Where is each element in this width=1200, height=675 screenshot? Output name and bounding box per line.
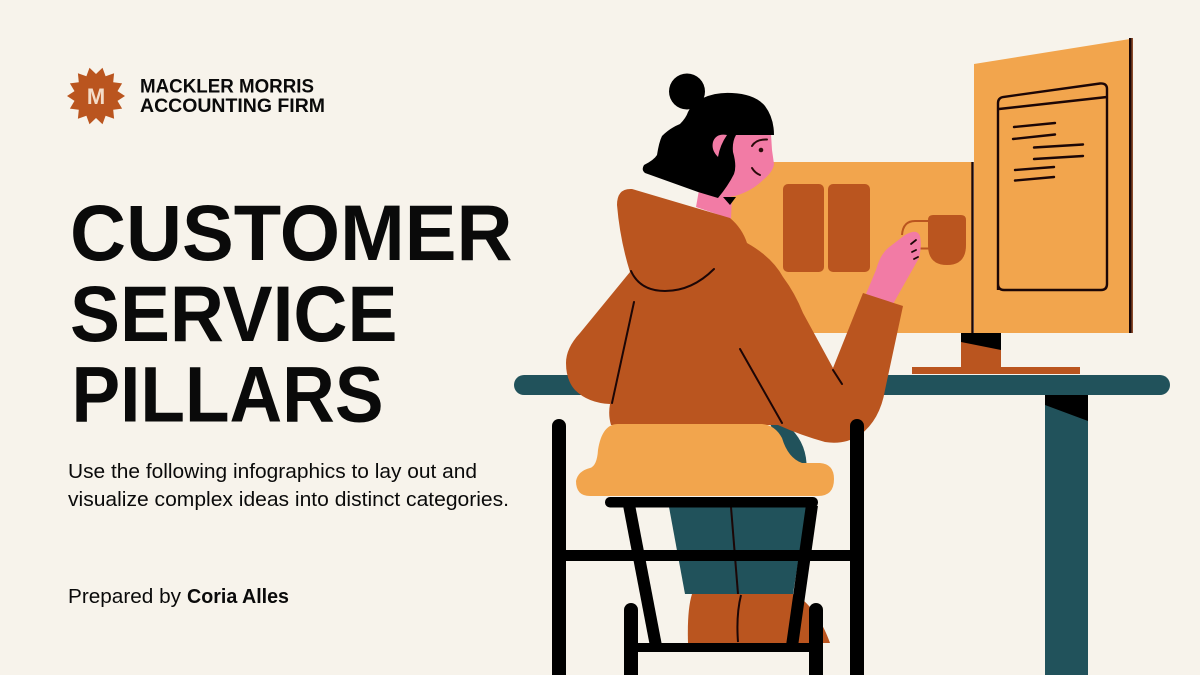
left monitor bbox=[720, 162, 973, 333]
description text: visualize complex ideas into distinct categories. bbox=[68, 489, 509, 511]
chin shadow bbox=[723, 197, 736, 205]
title bbox=[70, 188, 512, 438]
title: SERVICE bbox=[70, 269, 398, 358]
desk bbox=[514, 375, 1170, 675]
icon: starburst badge: M bbox=[87, 84, 105, 109]
hoodie bbox=[566, 189, 903, 443]
logo bbox=[67, 68, 325, 124]
illustration: person at desk bbox=[514, 38, 1170, 675]
presenter credit bbox=[68, 586, 289, 608]
hair bbox=[643, 93, 774, 198]
hand bbox=[866, 232, 921, 304]
right monitor bbox=[974, 38, 1133, 333]
hair bun bbox=[669, 74, 705, 110]
description text: Use the following infographics to lay out and bbox=[68, 461, 477, 483]
facial features bbox=[752, 139, 767, 175]
teal trousers bbox=[669, 424, 807, 594]
presenter credit: Coria Alles bbox=[187, 586, 289, 608]
coffee mug bbox=[902, 215, 966, 265]
chair frame bbox=[559, 426, 857, 675]
title: CUSTOMER bbox=[70, 188, 512, 277]
icon: starburst badge bbox=[67, 68, 125, 124]
monitor stand bbox=[912, 333, 1080, 374]
shoes bbox=[688, 594, 830, 643]
company name bbox=[140, 76, 325, 117]
title: PILLARS bbox=[72, 350, 384, 438]
description text bbox=[68, 461, 509, 511]
ear bbox=[713, 135, 727, 157]
company name: ACCOUNTING FIRM bbox=[140, 96, 325, 117]
presenter credit: Prepared by bbox=[68, 586, 181, 608]
face bbox=[712, 134, 774, 198]
neck bbox=[696, 190, 732, 219]
company name: MACKLER MORRIS bbox=[140, 76, 314, 98]
chair cushion bbox=[576, 424, 834, 496]
